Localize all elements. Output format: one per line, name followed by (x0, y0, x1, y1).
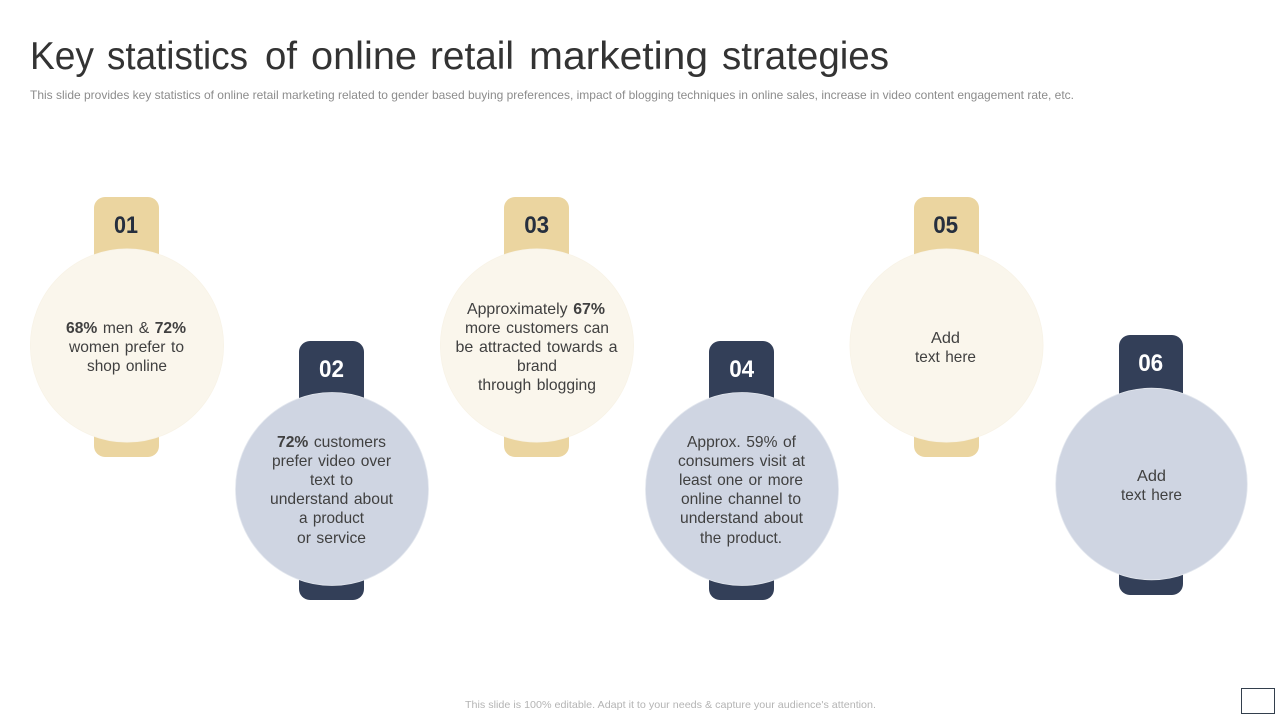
text: statistic 06 (1121, 468, 1182, 504)
panel: statistic 06 (1056, 335, 1247, 595)
text: statistic 06: Add (1137, 468, 1166, 485)
text: statistic 02: a product (299, 510, 365, 527)
number: 01: 01 (114, 212, 138, 239)
text: statistic 03: through blogging (478, 377, 596, 394)
circle: 04 (646, 392, 838, 586)
number: 04: 04 (729, 356, 755, 383)
number: 03: 03 (524, 212, 549, 239)
text: statistic 01: 68% men & 72% (66, 320, 186, 337)
number: 02: 02 (319, 356, 344, 383)
text: statistic 01: shop online (87, 358, 167, 375)
panel: statistic 01 (30, 197, 224, 457)
circle: 03 (440, 249, 634, 442)
text: statistic 06: text here (1121, 487, 1182, 504)
title: retail (430, 35, 514, 78)
text: statistic 03: brand (517, 358, 557, 375)
text: statistic 02: or service (297, 530, 366, 547)
title: marketing (529, 35, 708, 78)
tab: 01 (94, 197, 159, 457)
text: statistic 05: text here (915, 349, 976, 366)
text: statistic 04: understand about (680, 510, 804, 527)
tab: 06 (1119, 335, 1183, 595)
panel: statistic 03 (440, 197, 634, 457)
tab: 02 (299, 341, 364, 600)
text: statistic 04: online channel to (681, 491, 801, 508)
text: statistic 03: more customers can (465, 320, 609, 337)
number: 05: 05 (933, 212, 958, 239)
footer note: This slide is 100% editable. Adapt it to your needs & capture your audience's attention. (465, 699, 876, 711)
text: statistic 04: consumers visit at (678, 453, 806, 470)
title: statistics (107, 35, 248, 78)
text: statistic 02: 72% customers (277, 434, 386, 451)
text: statistic 02 (270, 434, 394, 547)
subtitle text: This slide provides key statistics of online retail marketing related to gender based buying preferences, impact of blogging techniques in online sales, increase in video content engagement rate, etc. (30, 88, 1074, 102)
text: statistic 03 (456, 301, 618, 394)
circle: 05 (850, 249, 1043, 442)
panel: statistic 05 (850, 197, 1043, 457)
text: statistic 04: Approx. 59% of (687, 434, 797, 451)
tab: 04 (709, 341, 774, 600)
text: statistic 02: prefer video over (272, 453, 392, 470)
text: statistic 04 (678, 434, 806, 547)
circle: 02 (236, 392, 428, 586)
title: online (311, 35, 417, 78)
empty outlined box (1242, 688, 1274, 714)
text: statistic 02: text to (310, 472, 353, 489)
tab: 05 (914, 197, 979, 457)
circle: 06 (1056, 388, 1247, 580)
title: Key (30, 35, 94, 78)
text: statistic 02: understand about (270, 491, 394, 508)
text: statistic 03: be attracted towards a (456, 339, 618, 356)
circle: 01 (30, 249, 224, 442)
title: strategies (722, 35, 889, 78)
panel: statistic 02 (236, 341, 428, 600)
panel: statistic 04 (646, 341, 838, 600)
title: of (265, 35, 297, 78)
text: statistic 01: women prefer to (68, 339, 184, 356)
tab: 03 (504, 197, 569, 457)
text: statistic 04: least one or more (679, 472, 803, 489)
number: 06: 06 (1138, 350, 1163, 377)
text: statistic 05: Add (931, 330, 960, 347)
text: statistic 03: Approximately 67% (467, 301, 605, 318)
text: statistic 05 (915, 330, 976, 366)
text: statistic 04: the product. (700, 530, 782, 547)
text: statistic 01 (66, 320, 186, 375)
